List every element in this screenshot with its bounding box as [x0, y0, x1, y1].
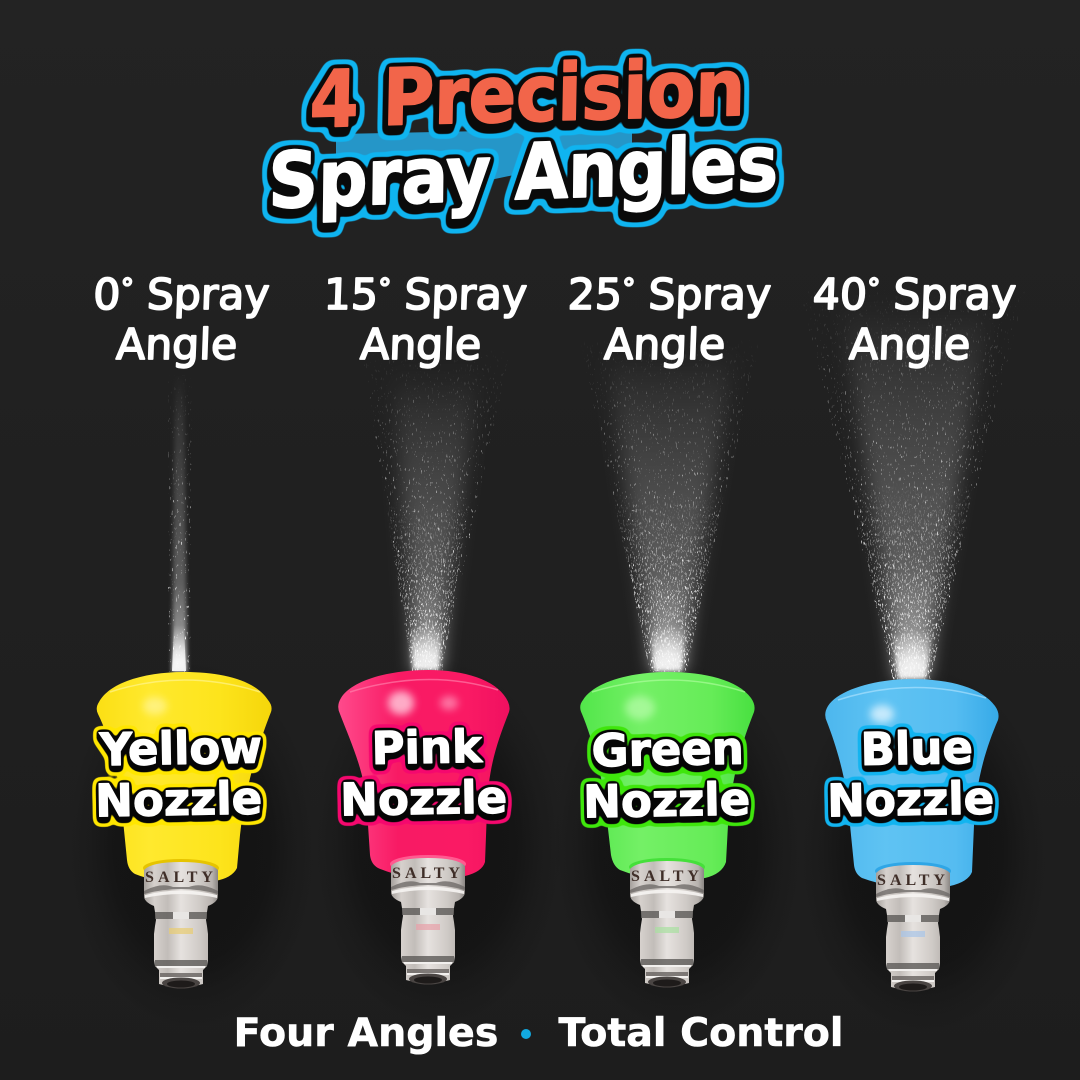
- green nozzle label: [583, 722, 751, 828]
- body: [338, 670, 510, 879]
- yellow nozzle label: Nozzle: [95, 772, 263, 827]
- separator dot: [521, 1029, 531, 1039]
- title line 1: 4 Precision: [309, 42, 746, 146]
- spray angle label: 0 degrees: Spray: [133, 271, 270, 320]
- blue nozzle label: Nozzle: [827, 772, 995, 827]
- spray angle label: 25 degrees: Angle: [603, 321, 726, 370]
- brand: SALTY: [631, 868, 703, 885]
- pink nozzle label: Nozzle: [340, 771, 508, 826]
- spray: 40 degree fan: [800, 290, 1025, 680]
- metal quick connector: [144, 862, 218, 988]
- shadow: [313, 657, 563, 1027]
- tagline: Four Angles: [234, 1010, 498, 1056]
- blue nozzle: [799, 665, 1049, 1035]
- pink nozzle label: [340, 720, 508, 826]
- spray angle label: 0 degrees: Angle: [115, 321, 238, 370]
- metal quick connector: [876, 865, 950, 992]
- shadow: [553, 660, 803, 1030]
- green nozzle: [553, 660, 803, 1030]
- title backing panel: [336, 128, 632, 180]
- spray angle label: 15 degrees: 15: [323, 271, 379, 320]
- blue nozzle label: Blue: [860, 721, 973, 776]
- spray angle label: 0 degrees: 0: [93, 271, 121, 320]
- brand: SALTY: [392, 865, 464, 882]
- metal quick connector: [391, 858, 465, 984]
- spray angle label: 25 degrees: 25: [567, 271, 623, 320]
- spray angle label: 15 degrees: °: [378, 274, 392, 304]
- spray: 25 degree fan: [580, 340, 760, 672]
- shadow: [67, 660, 317, 1030]
- metal quick connector: [630, 861, 704, 988]
- spray angle label: 25 degrees: Spray: [634, 271, 772, 320]
- spray angle label: 15 degrees: Angle: [359, 321, 482, 370]
- pink nozzle: [313, 657, 563, 1027]
- green nozzle label: Nozzle: [583, 773, 751, 828]
- body: [580, 672, 755, 880]
- title line 2: Spray Angles: [268, 119, 779, 227]
- shadow: [799, 665, 1049, 1035]
- spray angle label: 25 degrees: °: [622, 274, 636, 304]
- yellow nozzle label: Yellow: [98, 721, 262, 776]
- spray angle label: 15 degrees: Spray: [390, 271, 528, 320]
- body: [97, 672, 272, 883]
- green nozzle label: Green: [591, 722, 744, 777]
- spray: 15 degree fan: [362, 350, 510, 672]
- brand: SALTY: [877, 872, 949, 889]
- spray angle label: 40 degrees: °: [867, 274, 881, 304]
- brand: SALTY: [145, 869, 217, 886]
- title: [268, 42, 779, 227]
- tagline: Total Control: [559, 1010, 843, 1056]
- yellow nozzle: [67, 660, 317, 1030]
- spray angle label: 40 degrees: 40: [812, 271, 868, 320]
- tagline: [234, 1010, 843, 1056]
- spray angle label: 40 degrees: Angle: [848, 321, 971, 370]
- blue nozzle label: [827, 721, 995, 827]
- body: [825, 679, 999, 888]
- spray: 0 degree jet: [168, 375, 192, 672]
- pink nozzle label: Pink: [371, 720, 483, 775]
- spray angle label: 0 degrees: °: [120, 274, 134, 304]
- spray angle label: 40 degrees: Spray: [879, 271, 1017, 320]
- yellow nozzle label: [95, 721, 263, 827]
